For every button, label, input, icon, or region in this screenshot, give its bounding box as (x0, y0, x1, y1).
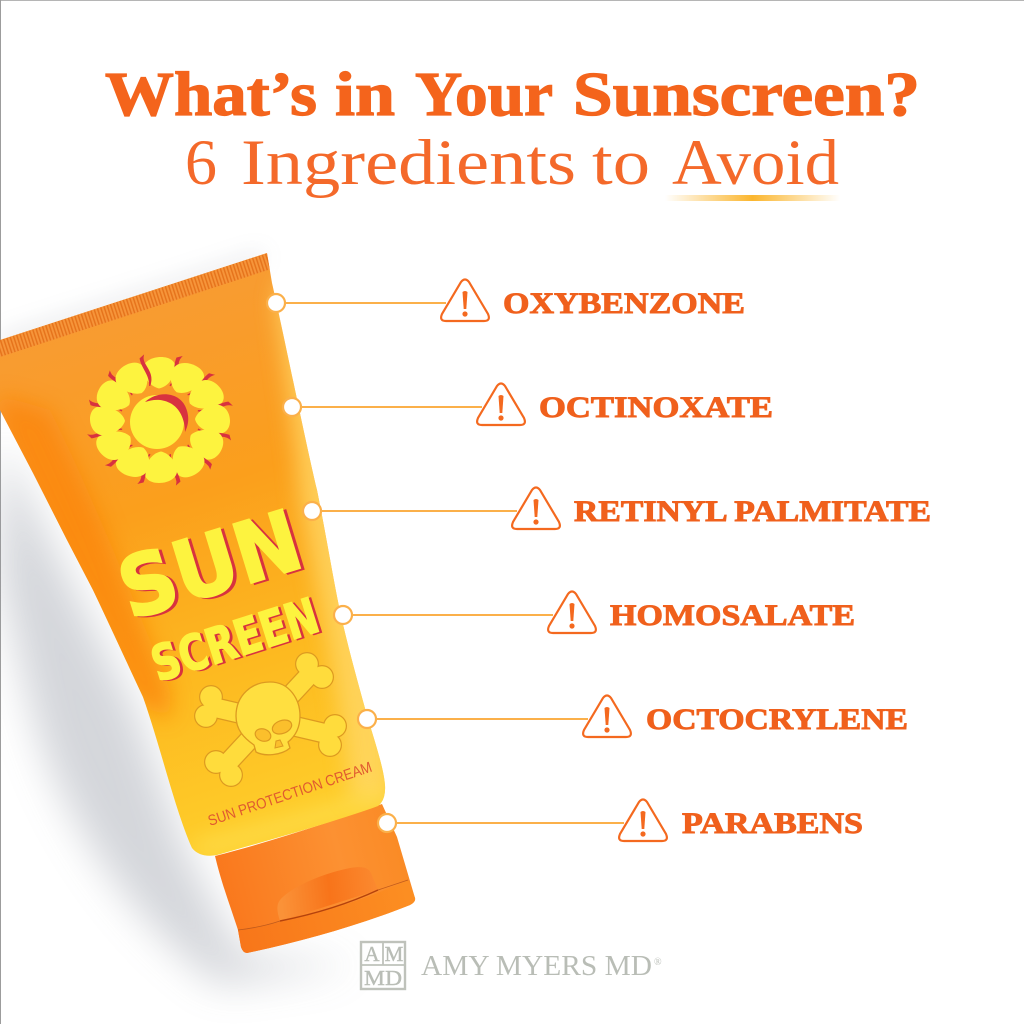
callout 6: parabens (378, 800, 863, 841)
warning icon 1 (441, 280, 489, 321)
label 1: OXYBENZONE (503, 287, 745, 320)
heading line 1: Your (415, 61, 553, 129)
label 4: HOMOSALATE (610, 599, 855, 632)
heading line 1 (105, 61, 920, 129)
heading line 2: 6 (185, 127, 217, 199)
label 2: OCTINOXATE (539, 391, 773, 424)
connector 1 (267, 294, 446, 312)
SUN label: SUN (111, 492, 316, 640)
sunscreen tube (0, 240, 415, 953)
warning icon 2 (477, 384, 525, 425)
SCREEN label: SCREEN (147, 588, 328, 694)
connector 6 (378, 814, 624, 832)
callout 5: octocrylene (358, 696, 908, 737)
warning icon 4 (548, 592, 596, 633)
heading line 2: to (592, 127, 650, 199)
label 3: RETINYL PALMITATE (574, 495, 931, 528)
logo mark: M (385, 942, 404, 966)
warning icon 6 (619, 800, 667, 841)
registered mark: ® (654, 957, 662, 968)
SUN label: SUN (107, 491, 313, 639)
heading line 2: Ingredients (241, 127, 576, 199)
callout 3: retinyl palmitate (303, 488, 931, 529)
tube cap (215, 804, 415, 953)
heading line 1: Sunscreen? (573, 61, 920, 129)
logo mark (361, 942, 405, 990)
heading line 2: Avoid (672, 127, 839, 199)
warning icon 5 (583, 696, 631, 737)
warning icon 3 (512, 488, 560, 529)
logo wordmark: AMY MYERS MD (421, 951, 652, 982)
callout 4: homosalate (334, 592, 855, 633)
title underline (665, 195, 840, 201)
brand logo (361, 942, 662, 990)
label 6: PARABENS (682, 807, 863, 840)
connector 3 (303, 502, 517, 520)
label 5: OCTOCRYLENE (646, 703, 908, 736)
callout 2: octinoxate (283, 384, 773, 425)
sun logo (89, 356, 231, 484)
connector 2 (283, 398, 482, 416)
product caption: SUN PROTECTION CREAM (206, 759, 374, 830)
heading line 1: What’s (105, 61, 317, 129)
connector 5 (358, 710, 588, 728)
heading line 2 (185, 127, 839, 199)
skull and crossbones (194, 652, 347, 787)
crimped seal (0, 253, 271, 357)
logo mark: A (364, 942, 380, 966)
SCREEN label: SCREEN (144, 587, 326, 693)
tube shadow (0, 250, 360, 985)
heading line 1: in (335, 61, 395, 129)
connector 4 (334, 606, 553, 624)
logo mark: MD (364, 966, 402, 990)
title (105, 61, 920, 199)
tube body (0, 240, 400, 870)
callout 1: oxybenzone (267, 280, 745, 321)
